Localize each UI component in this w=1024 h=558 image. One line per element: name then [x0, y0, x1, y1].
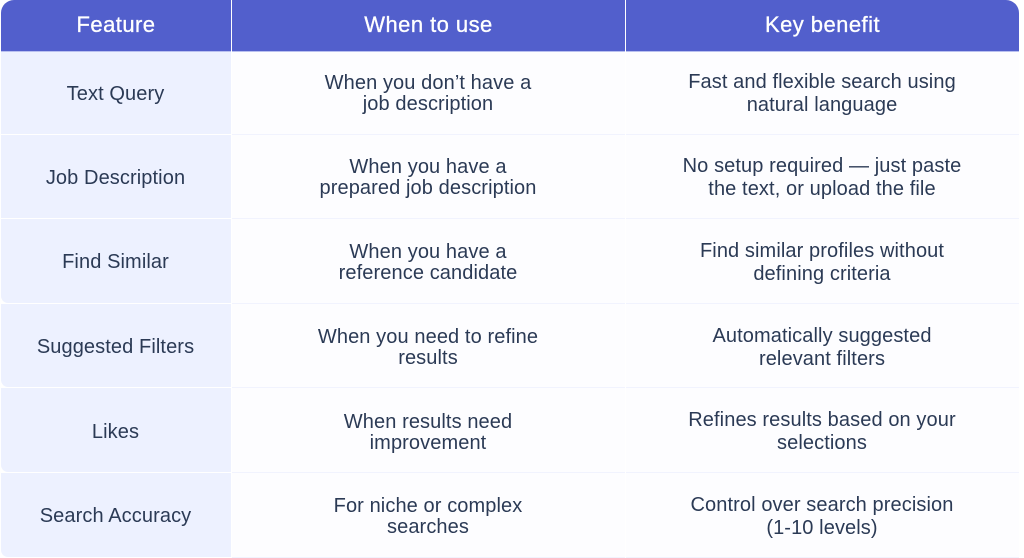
row 6 when to use: [232, 473, 625, 558]
row 5 when to use: When results need: [344, 411, 512, 433]
row 2 feature: Job Description: [1, 135, 231, 218]
row 3 key benefit: defining criteria: [753, 263, 891, 285]
header: Feature: Feature: [77, 12, 155, 37]
row 4 key benefit: [626, 304, 1019, 388]
row 2 key benefit: No setup required — just paste: [683, 155, 961, 177]
row 1 feature: Text Query: Text Query: [67, 83, 164, 105]
header: Key benefit: Key benefit: [765, 12, 880, 37]
row 5 feature: Likes: [1, 388, 231, 472]
row 1 key benefit: Fast and flexible search using: [688, 71, 956, 93]
row 4 key benefit: Automatically suggested: [712, 325, 932, 347]
header: When to use: [232, 0, 625, 52]
row 2 key benefit: [626, 135, 1019, 219]
row 2 key benefit: the text, or upload the file: [708, 178, 936, 200]
row 3 key benefit: Find similar profiles without: [700, 240, 944, 262]
row 4 key benefit: relevant filters: [759, 348, 885, 370]
header: Feature: [1, 0, 231, 52]
row 6 when to use: For niche or complex: [334, 495, 522, 517]
row 5 when to use: improvement: [370, 432, 486, 454]
row 3 key benefit: [626, 219, 1019, 304]
row 1 when to use: [232, 52, 625, 135]
row 6 key benefit: Control over search precision: [690, 494, 954, 516]
row 1 key benefit: [626, 52, 1019, 135]
row 5 when to use: [232, 388, 625, 473]
row 1 feature: Text Query: [1, 52, 231, 134]
row 6 key benefit: (1-10 levels): [766, 517, 878, 539]
row 5 key benefit: [626, 388, 1019, 473]
row 3 feature: Find Similar: Find Similar: [62, 251, 169, 273]
row 4 when to use: When you need to refine: [318, 326, 538, 348]
row 1 key benefit: natural language: [747, 94, 897, 116]
row 6 feature: Search Accuracy: Search Accuracy: [40, 505, 191, 527]
row 1 when to use: job description: [363, 93, 493, 115]
row 3 when to use: [232, 219, 625, 304]
header: When to use: When to use: [364, 12, 493, 37]
row 6 key benefit: [626, 473, 1019, 558]
row 4 when to use: results: [398, 347, 458, 369]
row 2 feature: Job Description: Job Description: [46, 167, 185, 189]
row 6 feature: Search Accuracy: [1, 473, 231, 557]
row 6 when to use: searches: [387, 516, 469, 538]
row 4 when to use: [232, 304, 625, 388]
header: Key benefit: [626, 0, 1019, 52]
row 5 feature: Likes: Likes: [92, 421, 139, 443]
row 2 when to use: [232, 135, 625, 219]
row 1 when to use: When you don’t have a: [325, 72, 531, 94]
row 2 when to use: When you have a: [349, 156, 507, 178]
row 2 when to use: prepared job description: [320, 177, 536, 199]
row 3 when to use: reference candidate: [339, 262, 517, 284]
row 4 feature: Suggested Filters: [1, 304, 231, 387]
row 3 when to use: When you have a: [349, 241, 507, 263]
row 5 key benefit: Refines results based on your: [688, 409, 956, 431]
row 5 key benefit: selections: [777, 432, 867, 454]
row 4 feature: Suggested Filters: Suggested Filters: [37, 336, 194, 358]
row 3 feature: Find Similar: [1, 219, 231, 303]
